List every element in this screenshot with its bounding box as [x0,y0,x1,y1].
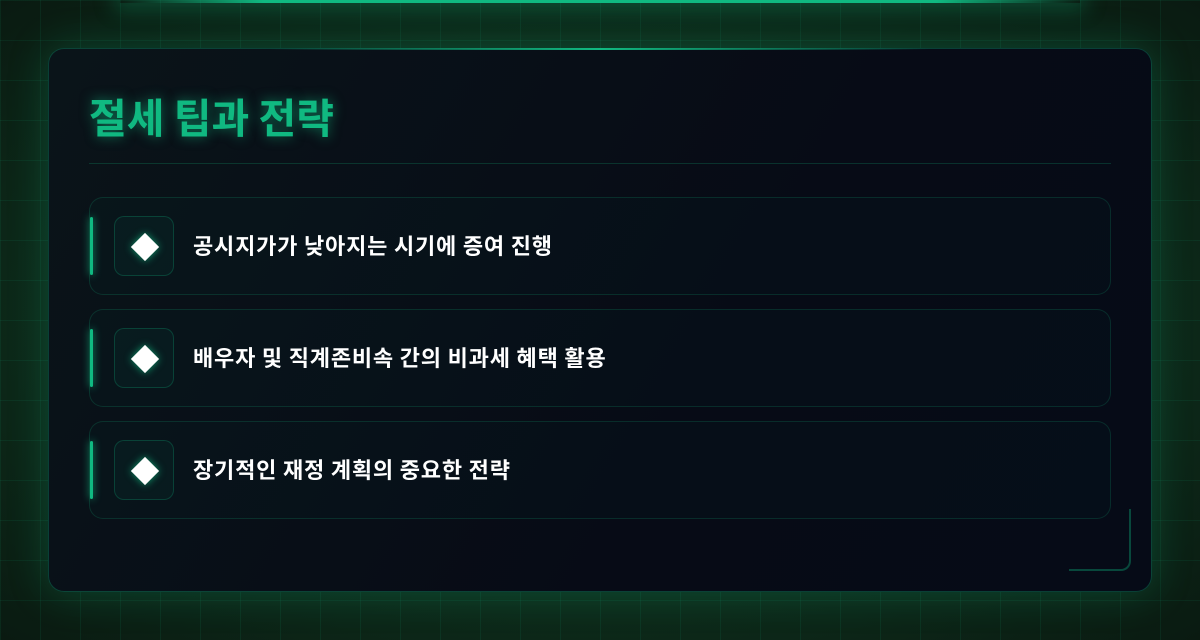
text: item 1: 공시지가가 낮아지는 시기에 증여 진행 [193,229,553,261]
item 1 [89,197,1111,295]
text: item 3: 장기적인 재정 계획의 중요한 전략 [193,453,511,485]
icon: diamond [114,216,174,276]
title: 절세 팁과 전략 [89,85,334,145]
item 3 [89,421,1111,519]
text: item 2: 배우자 및 직계존비속 간의 비과세 혜택 활용 [193,341,606,373]
item 2 [89,309,1111,407]
icon: diamond [114,328,174,388]
panel: main card [48,48,1152,592]
icon: diamond [114,440,174,500]
